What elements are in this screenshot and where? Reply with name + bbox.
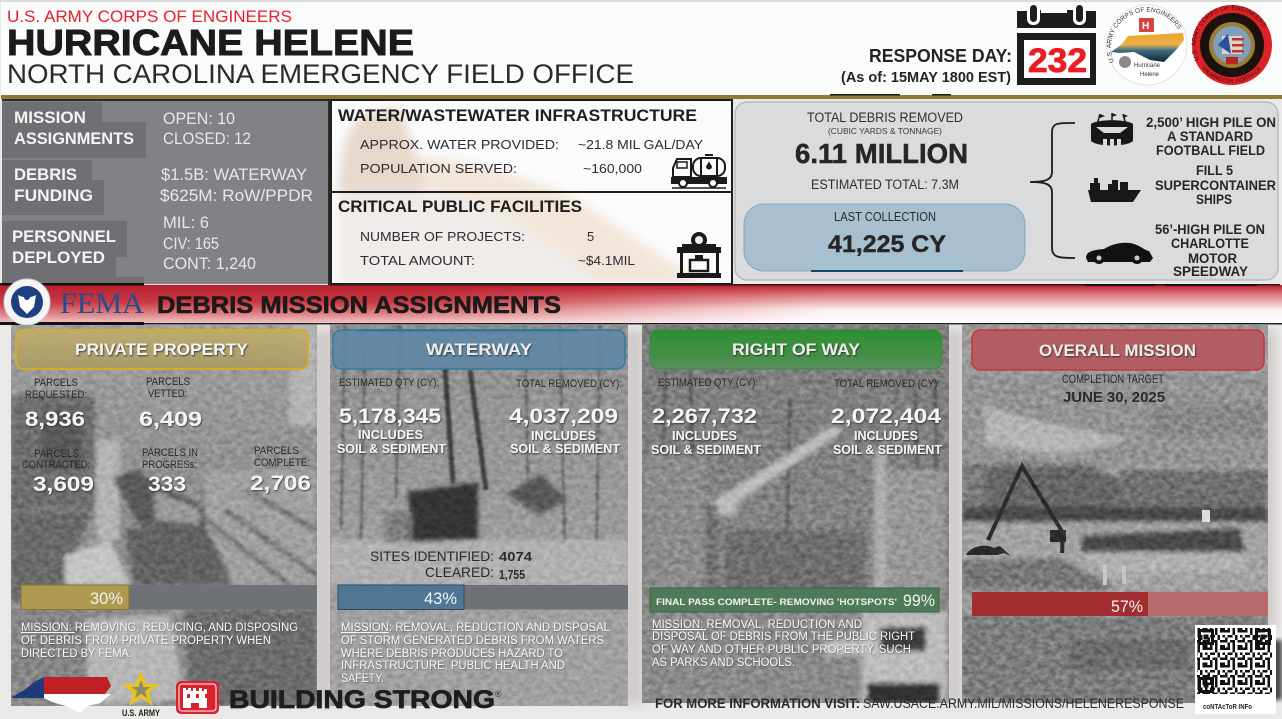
- debris funding: FUNDING: [14, 187, 93, 205]
- mission text: MISSION: REMOVAL, REDUCTION AND DISPOSAL: [341, 622, 611, 634]
- panel: critical public facilities: [331, 192, 732, 284]
- mission text: OF DEBRIS FROM PRIVATE PROPERTY WHEN: [21, 635, 271, 647]
- stats: parcels: 3,609: [33, 473, 94, 496]
- header band: [0, 0, 1282, 95]
- panel: right of way: [642, 325, 949, 703]
- comparison: football field: [1146, 115, 1276, 158]
- icon: calendar with day count: 232: [1028, 42, 1087, 80]
- progress bar: 99%: FINAL PASS COMPLETE- REMOVING 'HOTSPOTS': [656, 597, 897, 607]
- total debris text: 6.11 MILLION: [795, 138, 968, 169]
- header: overall mission: OVERALL MISSION: [1039, 341, 1196, 360]
- icon: race car: [1086, 243, 1153, 264]
- mission assignments: CLOSED: 12: [163, 129, 251, 148]
- last collection box: LAST COLLECTION: [834, 210, 936, 224]
- title: HURRICANE HELENE: [7, 22, 414, 63]
- stats: parcels: 2,706: [250, 472, 311, 495]
- stats: waterway quantities: SOIL & SEDIMENT: [337, 441, 446, 456]
- panel: water infrastructure: POPULATION SERVED:: [360, 161, 517, 176]
- mission text: DISPOSAL OF DEBRIS FROM THE PUBLIC RIGHT: [652, 631, 915, 643]
- mission text: DIRECTED BY FEMA.: [21, 648, 132, 660]
- comparison: speedway: [1155, 222, 1265, 279]
- mission text: SAFETY.: [341, 673, 384, 685]
- stats: parcels: CONTRACTED:: [22, 459, 90, 471]
- icon: army star: [122, 670, 160, 718]
- heading: DEBRIS MISSION ASSIGNMENTS: [157, 292, 561, 319]
- mission text: MISSION: REMOVING, REDUCING, AND DISPOSING: [21, 622, 298, 634]
- QR code: coNTAcToR INFo: [1203, 704, 1252, 711]
- FEMA wordmark: FEMA: [60, 287, 144, 320]
- icon: NC state flag map: [12, 677, 111, 713]
- footer logos: ®: [495, 689, 502, 699]
- mission text: [652, 619, 915, 669]
- comparison: ships: SHIPS: [1196, 192, 1232, 207]
- stats: parcels: 333: [148, 473, 186, 496]
- comparison: speedway: MOTOR: [1188, 251, 1237, 266]
- comparison: speedway: CHARLOTTE: [1171, 236, 1249, 251]
- total debris text: [795, 110, 968, 192]
- icon: water truck: [672, 155, 726, 188]
- panel: critical public facilities: 5: [587, 229, 594, 244]
- mission assignments: MISSION: [14, 109, 86, 127]
- mission text: MISSION: REMOVAL, REDUCTION AND: [652, 619, 862, 631]
- stats: right of way quantities: 2,267,732: [652, 405, 757, 428]
- icon: calendar with day count: [1017, 4, 1096, 85]
- heading: WATER/WASTEWATER INFRASTRUCTURE: [338, 106, 697, 125]
- icon: container ship: [1088, 178, 1141, 202]
- panel edge shadows: [312, 330, 1276, 705]
- header: waterway: [333, 329, 625, 369]
- last collection box: [744, 204, 1025, 272]
- mission text: [341, 622, 611, 685]
- response day label: (As of: 15MAY 1800 EST): [841, 69, 1011, 86]
- debris funding: DEBRIS: [14, 166, 77, 184]
- icon: engineers castle: [176, 681, 219, 714]
- stats: right of way quantities: INCLUDES: [854, 428, 918, 443]
- mission text: OF WAY AND OTHER PUBLIC PROPERTY, SUCH: [652, 644, 911, 656]
- completion target: [1062, 374, 1165, 406]
- panel: critical public facilities: ~$4.1MIL: [578, 253, 635, 268]
- comparison: football field: A STANDARD: [1167, 129, 1253, 144]
- stats: waterway quantities: TOTAL REMOVED (CY):: [516, 378, 622, 390]
- mission text: OF STORM GENERATED DEBRIS FROM WATERS: [341, 635, 604, 647]
- icon: stadium: [1091, 113, 1133, 146]
- slogan: BUILDING STRONG: [229, 686, 495, 714]
- panel: critical public facilities: TOTAL AMOUNT:: [360, 253, 475, 268]
- logo: hurricane helene emblem: [1106, 4, 1188, 86]
- comparison: football field: 2,500’ HIGH PILE ON: [1146, 115, 1276, 130]
- logo: DHS seal: [4, 279, 50, 325]
- panel: private property: [11, 325, 317, 706]
- header: private property: [16, 330, 308, 369]
- band: debris mission assignments: [0, 279, 1282, 325]
- photo: grapple machine in forest: [330, 325, 628, 706]
- subtitle: NORTH CAROLINA EMERGENCY FIELD OFFICE: [7, 59, 634, 89]
- footer link: [655, 696, 1184, 711]
- stats: waterway quantities: 4,037,209: [509, 405, 618, 428]
- photo: skid steer clearing debris: [11, 325, 317, 706]
- panel: water infrastructure: ~160,000: [583, 161, 642, 176]
- stats: parcels: 8,936: [25, 408, 85, 431]
- mission text: AS PARKS AND SCHOOLS.: [652, 657, 795, 669]
- panel: water infrastructure: ~21.8 MIL GAL/DAY: [578, 137, 703, 152]
- progress bar: 43%: 43%: [424, 589, 457, 608]
- personnel deployed: PERSONNEL: [12, 228, 116, 246]
- comparison: ships: [1155, 163, 1276, 207]
- debris funding: $1.5B: WATERWAY: [161, 165, 307, 184]
- personnel deployed: [12, 213, 256, 273]
- stats: waterway quantities: 5,178,345: [339, 405, 441, 428]
- total debris text: TOTAL DEBRIS REMOVED: [807, 110, 963, 125]
- stats: right of way quantities: SOIL & SEDIMENT: [833, 442, 942, 457]
- comparison: ships: FILL 5: [1196, 163, 1233, 178]
- debris funding: [14, 165, 313, 205]
- progress bar: 57%: 57%: [1111, 597, 1143, 616]
- stats: waterway quantities: SOIL & SEDIMENT: [510, 441, 620, 456]
- stats: parcels: PARCELS IN: [142, 447, 198, 459]
- progress bar: 99%: 99%: [903, 591, 935, 610]
- brace: [1030, 123, 1075, 258]
- header: waterway: WATERWAY: [426, 340, 533, 359]
- header: private property: PRIVATE PROPERTY: [75, 340, 249, 359]
- stats: parcels: [22, 376, 311, 496]
- personnel deployed: DEPLOYED: [12, 249, 105, 267]
- footer link: FOR MORE INFORMATION VISIT:: [655, 696, 860, 711]
- stats: sites: CLEARED:: [425, 564, 494, 580]
- stats: parcels: PARCELS: [34, 377, 78, 389]
- stats: waterway quantities: [337, 377, 622, 456]
- stats: parcels: PARCELS: [254, 445, 299, 457]
- personnel deployed: MIL: 6: [163, 213, 209, 232]
- panel: overall mission: [962, 325, 1268, 706]
- stats: sites: 1,755: [499, 567, 525, 582]
- mission assignments: OPEN: 10: [163, 109, 235, 128]
- comparison: ships: SUPERCONTAINER: [1155, 178, 1276, 193]
- panel: critical public facilities: NUMBER OF PROJECTS:: [360, 229, 525, 244]
- comparison: football field: FOOTBALL FIELD: [1156, 143, 1265, 158]
- photo: excavator on barge: [962, 325, 1268, 706]
- response day label: RESPONSE DAY:: [869, 46, 1012, 66]
- logo: hurricane helene emblem: Hurricane: [1134, 63, 1161, 69]
- stats: sites: 4074: [499, 549, 533, 564]
- mission assignments: ASSIGNMENTS: [14, 130, 134, 148]
- stats: sites: SITES IDENTIFIED:: [370, 548, 494, 564]
- progress bar: 99%: [650, 588, 939, 612]
- heading: CRITICAL PUBLIC FACILITIES: [338, 197, 582, 216]
- logo: wilmington district seal: [1192, 5, 1272, 85]
- mission text: WHERE DEBRIS PRODUCES HAZARD TO: [341, 648, 563, 660]
- completion target: COMPLETION TARGET: [1062, 374, 1164, 386]
- panel: key figures: [2, 99, 330, 285]
- footer logos: [12, 670, 502, 718]
- panel: water infrastructure: APPROX. WATER PROVIDED:: [360, 137, 559, 152]
- total debris text: (CUBIC YARDS & TONNAGE): [828, 127, 942, 136]
- stats: parcels: 6,409: [139, 408, 202, 431]
- response day label: [841, 46, 1012, 86]
- org name: U.S. ARMY CORPS OF ENGINEERS: [7, 7, 292, 26]
- stats: parcels: PROGRESs:: [142, 459, 197, 471]
- logo: wilmington district seal: U.S. ARMY CORPS OF ENGINEERS: [1192, 5, 1266, 62]
- header: right of way: [650, 330, 942, 369]
- personnel deployed: CONT: 1,240: [163, 254, 256, 273]
- comparison: speedway: SPEEDWAY: [1173, 264, 1248, 279]
- progress bar: 57%: [972, 592, 1268, 616]
- icon: fire station: [677, 232, 721, 278]
- stats: sites: [370, 548, 533, 582]
- stats: waterway quantities: INCLUDES: [531, 428, 596, 443]
- icon: army star: U.S. ARMY: [122, 708, 160, 718]
- panel: water infrastructure: [331, 100, 732, 192]
- logo: hurricane helene emblem: U.S. ARMY CORPS OF ENGINEERS: [1106, 7, 1182, 64]
- header: right of way: RIGHT OF WAY: [732, 340, 861, 359]
- logo: hurricane helene emblem: H: [1142, 21, 1149, 32]
- mission text: INFRASTRUCTURE, PUBLIC HEALTH AND: [341, 660, 565, 672]
- stats: parcels: VETTED:: [148, 388, 187, 400]
- QR code: [1195, 625, 1282, 714]
- last collection box: 41,225 CY: [828, 231, 946, 258]
- panel: total debris: [735, 102, 1278, 280]
- panel: infrastructure background: [330, 100, 733, 285]
- stats: right of way quantities: ESTIMATED QTY (CY):: [658, 377, 758, 389]
- stats: parcels: PARCELS: [34, 448, 79, 460]
- stats: parcels: REQUESTED:: [25, 389, 87, 401]
- stats: right of way quantities: [651, 377, 942, 457]
- progress bar: 43%: [338, 585, 628, 610]
- stats: right of way quantities: TOTAL REMOVED (CY):: [834, 378, 940, 390]
- debris funding: $625M: RoW/PPDR: [160, 186, 313, 205]
- photo: downed tree and utility pole: [642, 325, 949, 703]
- comparison: speedway: 56’-HIGH PILE ON: [1155, 222, 1265, 237]
- divider gold: [1, 94, 1282, 99]
- stats: right of way quantities: SOIL & SEDIMENT: [651, 442, 761, 457]
- stats: waterway quantities: INCLUDES: [358, 427, 423, 442]
- progress bar: 30%: [21, 585, 317, 610]
- stats: right of way quantities: 2,072,404: [831, 405, 941, 428]
- stats: waterway quantities: ESTIMATED QTY (CY):: [339, 377, 439, 389]
- completion target: JUNE 30, 2025: [1063, 390, 1165, 406]
- personnel deployed: CIV: 165: [163, 234, 219, 253]
- mission assignments: [14, 109, 251, 148]
- stats: parcels: PARCELS: [146, 376, 190, 388]
- footer link: SAW.USACE.ARMY.MIL/MISSIONS/HELENERESPONSE: [863, 696, 1184, 711]
- total debris text: ESTIMATED TOTAL: 7.3M: [811, 177, 959, 192]
- mission text: [21, 622, 298, 660]
- stats: parcels: COMPLETE:: [254, 457, 310, 469]
- progress bar: 30%: 30%: [90, 589, 123, 608]
- header: overall mission: [972, 330, 1264, 370]
- panel: waterway: [330, 325, 628, 706]
- logo: hurricane helene emblem: Helene: [1140, 72, 1160, 78]
- stats: right of way quantities: INCLUDES: [672, 428, 737, 443]
